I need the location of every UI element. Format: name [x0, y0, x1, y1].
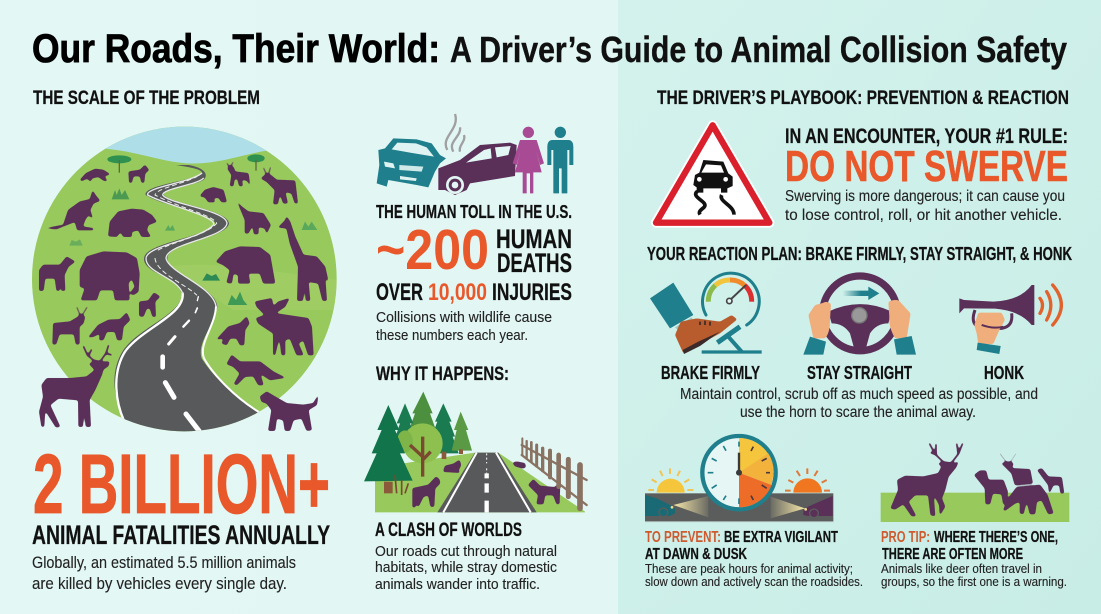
human toll description: these numbers each year. — [376, 327, 528, 344]
stat: ~200 human deaths: ~200 — [376, 218, 489, 282]
icon: car crash and people — [377, 114, 573, 195]
tip: pro tip heading: THERE ARE OFTEN MORE — [882, 546, 1023, 563]
tip: pro tip heading — [881, 529, 1058, 563]
icon: steering wheel and hands — [803, 276, 916, 355]
icon: air horn with sound waves — [959, 285, 1061, 354]
tip: pro tip heading: WHERE THERE’S ONE, — [934, 529, 1058, 546]
animal silhouettes — [39, 162, 328, 431]
stat: over 10,000 injuries: OVER — [376, 279, 423, 306]
illustration: forest meets road — [364, 392, 587, 512]
tip: to prevent heading — [645, 529, 838, 563]
swerve description: Swerving is more dangerous; it can cause you — [785, 188, 1065, 205]
illustration: road through animal habitat — [30, 123, 340, 437]
label: brake firmly: BRAKE FIRMLY — [661, 363, 760, 383]
title — [32, 27, 1067, 71]
icon: slippery road warning sign — [656, 125, 769, 223]
stat label: ANIMAL FATALITIES ANNUALLY — [32, 520, 330, 550]
tip: to prevent heading: BE EXTRA VIGILANT — [724, 529, 838, 546]
big stat: 2 billion+: 2 BILLION+ — [33, 437, 330, 531]
road surface — [114, 165, 263, 437]
stat description — [32, 553, 296, 593]
tip: to prevent heading: AT DAWN & DUSK — [645, 546, 748, 563]
heading: human toll: THE HUMAN TOLL IN THE U.S. — [376, 202, 572, 222]
trees and grass — [69, 154, 317, 305]
stat: over 10,000 injuries — [376, 279, 572, 306]
icon: brake pedal and gauge — [650, 273, 762, 354]
heading: why it happens: WHY IT HAPPENS: — [376, 364, 509, 385]
swerve description: to lose control, roll, or hit another vehicle. — [785, 207, 1062, 224]
background right — [618, 0, 1101, 614]
reaction description: use the horn to scare the animal away. — [740, 404, 976, 421]
stat description: Globally, an estimated 5.5 million animals — [32, 553, 296, 572]
tip: pro tip heading: PRO TIP: — [881, 529, 930, 546]
human toll description — [376, 309, 552, 344]
reaction description: Maintain control, scrub off as much speed as possible, and — [680, 386, 1038, 403]
tip: pro tip description: Animals like deer often travel in — [881, 562, 1042, 576]
tip: pro tip description — [881, 562, 1067, 589]
clash description — [375, 543, 557, 593]
illustration: deer group on grass — [881, 443, 1069, 522]
title: Our Roads, Their World: — [32, 27, 440, 71]
heading: the scale of the problem: THE SCALE OF THE PROBLEM — [33, 87, 260, 109]
tip: to prevent description: These are peak hours for animal activity; — [645, 562, 853, 576]
swerve description — [785, 188, 1065, 224]
stat: ~200 human deaths: DEATHS — [497, 248, 572, 278]
clash description: animals wander into traffic. — [375, 576, 540, 593]
tip: to prevent description: slow down and actively scan the roadsides. — [645, 575, 863, 589]
clash description: Our roads cut through natural — [375, 543, 557, 560]
background left — [0, 0, 618, 614]
stat: ~200 human deaths: HUMAN — [496, 224, 572, 254]
tip: pro tip description: groups, so the first one is a warning. — [881, 575, 1067, 589]
tip: to prevent heading: TO PREVENT: — [645, 529, 721, 546]
reaction description — [680, 386, 1038, 421]
stat: ~200 human deaths — [376, 218, 572, 282]
stat: over 10,000 injuries: 10,000 — [428, 279, 487, 306]
human toll description: Collisions with wildlife cause — [376, 309, 552, 326]
heading: a clash of worlds: A CLASH OF WORLDS — [375, 519, 522, 541]
stat description: are killed by vehicles every single day. — [32, 574, 287, 593]
stat: over 10,000 injuries: INJURIES — [492, 279, 572, 306]
illustration: clock at dawn and dusk — [645, 436, 833, 522]
tip: to prevent description — [645, 562, 863, 589]
label: stay straight: STAY STRAIGHT — [807, 363, 912, 383]
label: honk: HONK — [984, 363, 1024, 383]
clash description: habitats, while stray domestic — [375, 559, 557, 576]
